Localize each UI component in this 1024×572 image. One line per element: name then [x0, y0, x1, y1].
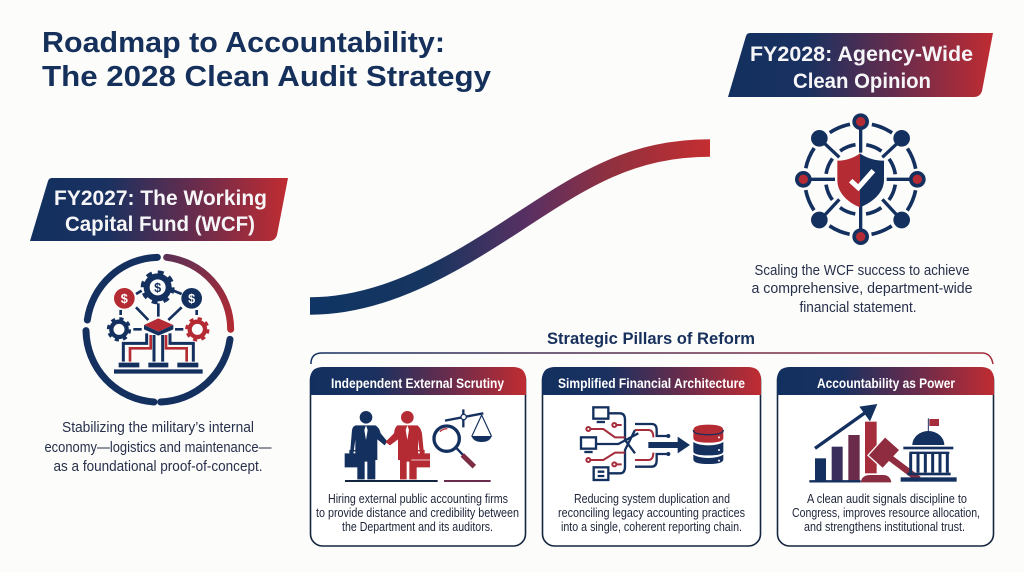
panel: accountability as power: [777, 367, 994, 546]
banner: FY2028: [728, 33, 993, 97]
red coin: [114, 288, 135, 309]
icon: working capital fund gears: [86, 257, 231, 402]
text: FY2027 description: as a foundational proof-of-concept.: [54, 459, 262, 475]
panel text: Reducing system duplication and: [574, 491, 730, 506]
title: [42, 27, 491, 93]
banner: FY2027: [30, 178, 288, 241]
panel text: Congress, improves resource allocation,: [792, 505, 980, 520]
red traces: [586, 423, 653, 466]
main arrow: [648, 437, 690, 453]
panel: accountability as power: Accountability as Power: [817, 375, 955, 391]
panel text: [558, 491, 745, 534]
base: [114, 363, 203, 374]
panel text: [792, 491, 980, 534]
gavel: [868, 437, 900, 469]
central platform: [144, 318, 173, 332]
bracket: [311, 353, 993, 364]
roadmap curve: [310, 148, 710, 306]
left gear: [111, 322, 127, 337]
panel text: reconciling legacy accounting practices: [558, 505, 745, 520]
panel text: and strengthens institutional trust.: [804, 519, 965, 534]
panel: simplified financial architecture: Simplified Financial Architecture: [558, 375, 745, 391]
banner: FY2028: FY2028: Agency-Wide: [750, 43, 973, 66]
ring segments: [86, 257, 231, 402]
bars: [815, 458, 826, 482]
panel: independent external scrutiny: [310, 367, 526, 546]
panel header: [542, 367, 761, 395]
trend arrow: [815, 412, 867, 448]
nodes: [795, 113, 926, 245]
text: FY2027 description: Stabilizing the military’s internal: [62, 420, 254, 436]
panel header: [310, 367, 526, 395]
banner: FY2027: FY2027: The Working: [54, 187, 267, 210]
text: FY2028 description: financial statement.: [800, 300, 916, 316]
icon: working capital fund gears: $: [121, 292, 128, 306]
panel text: Hiring external public accounting firms: [328, 491, 508, 506]
text: FY2028 description: a comprehensive, department-wide: [752, 281, 973, 297]
panel header: [777, 367, 994, 395]
navy coin: [181, 288, 202, 309]
top gear: [147, 276, 169, 298]
panel text: [316, 491, 519, 534]
panel text: to provide distance and credibility between: [316, 505, 519, 520]
icon: chart, gavel and capitol: [809, 404, 957, 482]
text: FY2027 description: [44, 420, 272, 475]
icon: working capital fund gears: $: [154, 281, 161, 295]
panel: independent external scrutiny: Independent External Scrutiny: [331, 375, 504, 391]
icon: systems to database: [581, 407, 723, 480]
banner: FY2028: Clean Opinion: [793, 70, 931, 93]
panel text: the Department and its auditors.: [342, 519, 493, 534]
right gear: [190, 322, 205, 337]
text: FY2027 description: economy—logistics and maintenance—: [44, 440, 272, 456]
spokes: [810, 128, 911, 230]
icon: working capital fund gears: $: [188, 292, 195, 306]
icon: shield network: [795, 113, 926, 245]
title: Roadmap to Accountability:: [42, 27, 445, 59]
banner: FY2027: Capital Fund (WCF): [65, 213, 255, 236]
text: FY2028 description: Scaling the WCF success to achieve: [754, 263, 970, 279]
systems: [581, 407, 668, 480]
database: [693, 425, 723, 443]
panel text: A clean audit signals discipline to: [807, 491, 967, 506]
text: FY2028 description: [752, 263, 973, 316]
capitol: [927, 418, 930, 433]
panel text: into a single, coherent reporting chain.: [561, 519, 742, 534]
connectors: [121, 291, 197, 362]
panel: simplified financial architecture: [542, 367, 761, 546]
title: The 2028 Clean Audit Strategy: [42, 61, 491, 93]
rings: [805, 123, 917, 235]
icon: handshake and scales: [345, 409, 492, 481]
heading: strategic pillars: Strategic Pillars of Reform: [547, 330, 755, 348]
shield: [837, 153, 860, 207]
